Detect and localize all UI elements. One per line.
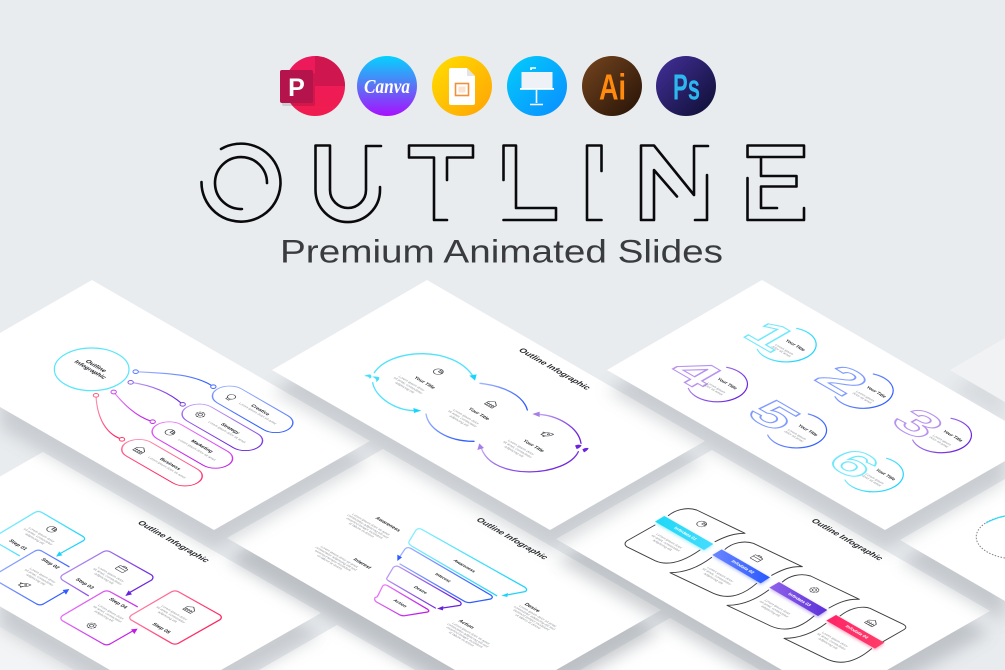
wave unit 2: sit amet, consectetur	[701, 567, 733, 586]
panel: dotted circle slide at right edge	[900, 479, 1005, 601]
cycle stage 3: adipiscing elit	[503, 445, 525, 458]
side label: desire: consectetur adipiscing elit sed	[512, 605, 556, 631]
panel: wavy infodata slide	[556, 450, 990, 670]
icon: Canva	[357, 56, 417, 116]
wave unit 4: Infodata 04	[844, 625, 870, 640]
pill: marketing	[145, 418, 240, 472]
wave unit 1: Lorem ipsum dolor	[655, 533, 684, 550]
icon: Keynote	[507, 56, 567, 116]
cycle stage 2: Your Title	[466, 407, 491, 421]
step 05: Lorem ipsum dolor	[160, 605, 189, 621]
pill: strategy	[175, 400, 270, 455]
wave unit 1: sit amet, consectetur	[650, 534, 682, 553]
step 04	[61, 591, 138, 645]
cycle stage 1: Your Title	[412, 376, 437, 390]
wave unit 3: Infodata 03	[787, 592, 813, 607]
side label: awareness: Awareness	[373, 516, 402, 533]
icon: PowerPoint: P	[288, 74, 305, 102]
step 02: adipiscing elit	[25, 573, 46, 586]
wave unit 3: Lorem ipsum dolor	[763, 599, 792, 616]
step 04: adipiscing elit	[93, 610, 115, 622]
cycle stage 2: sit amet, consectetur	[447, 410, 479, 428]
icon: Illustrator: Ai	[599, 66, 626, 108]
connector: strategy	[128, 380, 185, 406]
step 01: Lorem ipsum dolor	[27, 527, 56, 543]
wave unit 1: Infodata 01	[673, 526, 699, 541]
side label: interest: Lorem ipsum dolor sit amet	[319, 545, 359, 568]
number 5: Lorem ipsum	[786, 428, 807, 441]
pill: strategy: Lorem ipsum dolor sit amet	[207, 421, 247, 444]
number 5: dolor sit amet	[783, 430, 805, 443]
subtitle: Premium Animated Slides	[280, 234, 723, 270]
funnel level: desire: Desire	[413, 585, 429, 595]
wave unit 1	[625, 509, 745, 563]
side label: interest: ut labore et dolore	[316, 554, 344, 570]
number 4: 4	[657, 351, 735, 396]
step 04: sit amet, consectetur	[92, 605, 124, 624]
panel: bottom row slide centre	[259, 625, 415, 670]
funnel level: awareness: Awareness	[452, 559, 477, 573]
funnel level: desire	[387, 566, 461, 610]
step 02: sit amet, consectetur	[23, 568, 55, 587]
funnel level: action: Action	[392, 599, 409, 608]
title: OUTLINE drawn in outline strokes	[201, 144, 804, 222]
step 01	[0, 511, 85, 557]
number 1: dolor sit amet	[770, 345, 792, 358]
icon: PowerPoint	[280, 56, 345, 116]
pill: business: Business	[158, 457, 182, 471]
side label: interest: Interest	[351, 558, 373, 570]
cycle stage 3: sit amet, consectetur	[502, 440, 534, 459]
connector: creative	[133, 370, 216, 388]
number 6: 6	[815, 441, 892, 486]
number 3: dolor sit amet	[928, 436, 950, 448]
cycle stage 3: Your Title	[521, 439, 546, 453]
icon: Illustrator	[582, 56, 642, 116]
cycle stage 3	[477, 412, 589, 472]
number 3: Lorem ipsum	[931, 434, 952, 446]
side label: action: consectetur adipiscing elit sed	[446, 623, 490, 648]
slide title: Outline Infographic	[474, 516, 552, 561]
side label: action: eiusmod tempor incididunt	[445, 626, 484, 648]
number 4: dolor sit amet	[702, 383, 724, 396]
cycle stage 2	[426, 383, 527, 441]
pill: marketing: Lorem ipsum dolor sit amet	[177, 438, 217, 461]
wave unit 2: Infodata 02	[730, 560, 756, 575]
cycle stage 1: adipiscing elit	[394, 381, 415, 394]
icon: Google Slides	[432, 56, 492, 116]
pill: business: Lorem ipsum dolor sit amet	[147, 456, 187, 479]
panel: cycle slide	[272, 280, 705, 530]
wave unit 4: sit amet, consectetur	[816, 632, 848, 651]
side label: action	[439, 619, 493, 652]
step 03: Step 03	[73, 578, 95, 590]
slide title: Outline Infographic	[809, 517, 887, 562]
main circle: Infographic	[72, 360, 108, 381]
wave unit 3: adipiscing elit	[760, 605, 781, 617]
number 6: Your Title	[874, 468, 897, 481]
funnel level: awareness	[409, 529, 527, 597]
pill: creative: Creative	[249, 404, 271, 417]
panel: bottom row slide left	[0, 627, 74, 670]
side label: action: ut labore et dolore	[447, 631, 475, 647]
step 04: Lorem ipsum dolor	[97, 604, 126, 621]
side label: interest: consectetur adipiscing elit sed	[314, 546, 358, 571]
side label: desire: Desire	[522, 602, 541, 613]
wave unit 4	[784, 607, 906, 662]
pill: creative	[205, 382, 300, 437]
funnel level: action	[375, 585, 429, 616]
number 4: Lorem ipsum	[706, 382, 727, 394]
number 6: Lorem ipsum	[864, 473, 885, 485]
number 5	[735, 393, 827, 448]
icon: Canva: Canva	[364, 76, 410, 98]
step 05: sit amet, consectetur	[155, 606, 187, 624]
step 01: sit amet, consectetur	[22, 528, 54, 546]
number 6: dolor sit amet	[861, 474, 882, 487]
icon: Photoshop	[656, 56, 716, 116]
side label: interest: eiusmod tempor incididunt	[313, 549, 352, 572]
number 2: dolor sit amet	[851, 392, 873, 404]
step 05: adipiscing elit	[156, 611, 178, 623]
wave unit 4: adipiscing elit	[817, 637, 839, 650]
step 03	[61, 551, 153, 596]
side label: desire: Lorem ipsum dolor sit amet	[518, 605, 557, 628]
side label: desire	[506, 602, 559, 634]
number 1: Lorem ipsum	[774, 343, 795, 356]
wave unit 2: adipiscing elit	[702, 572, 724, 585]
side label: awareness: Lorem ipsum dolor sit amet	[351, 513, 391, 536]
step 02: Step 02	[39, 558, 61, 570]
panel: pills slide	[0, 280, 370, 530]
side label: awareness	[339, 512, 402, 543]
slide title: Outline Infographic	[135, 519, 213, 564]
cycle stage 1	[364, 354, 477, 413]
step 01: adipiscing elit	[24, 533, 45, 545]
connector: marketing	[111, 390, 155, 423]
number 2: Lorem ipsum	[855, 390, 876, 402]
number 4: Your Title	[716, 377, 739, 390]
wave unit 2: Lorem ipsum dolor	[706, 566, 735, 583]
panel: far right faded slide	[950, 338, 1005, 402]
icon row	[280, 56, 716, 116]
number 3: 3	[879, 401, 957, 446]
slide collage	[0, 280, 1005, 670]
pill: strategy: Strategy	[219, 422, 241, 435]
number 2: Your Title	[865, 385, 888, 399]
wave unit 2	[670, 542, 802, 596]
number 1: 1	[731, 314, 809, 359]
side label: action: Action	[456, 619, 475, 630]
number 1: Your Title	[784, 339, 807, 352]
side label: awareness: consectetur adipiscing elit sed	[346, 514, 390, 539]
step 01: Step 01	[7, 539, 28, 551]
step 03: Lorem ipsum dolor	[97, 566, 126, 583]
step 05	[130, 591, 221, 644]
wave unit 3	[727, 575, 859, 629]
side label: interest	[308, 544, 373, 575]
step 02: Lorem ipsum dolor	[28, 567, 57, 584]
funnel level: interest: Interest	[434, 572, 453, 583]
side label: desire: ut labore et dolore	[514, 614, 542, 630]
cycle stage 1: sit amet, consectetur	[392, 376, 424, 395]
step 02	[0, 550, 69, 605]
step 03: adipiscing elit	[93, 572, 115, 585]
cycle stage 1: Lorem ipsum dolor	[397, 375, 426, 392]
side label: awareness: eiusmod tempor incididunt	[345, 517, 384, 539]
side label: action: Lorem ipsum dolor sit amet	[451, 622, 491, 645]
wave unit 3: sit amet, consectetur	[758, 600, 790, 619]
main circle	[54, 348, 129, 391]
step 05: Step 05	[150, 622, 172, 635]
side label: awareness: ut labore et dolore	[347, 522, 375, 538]
slide title: Outline Infographic	[516, 346, 594, 391]
wave unit 4: Lorem ipsum dolor	[821, 631, 850, 648]
number 3: Your Title	[942, 429, 965, 443]
cycle stage 2: adipiscing elit	[448, 415, 470, 427]
icon: Photoshop: Ps	[673, 66, 700, 108]
step 04: Step 04	[107, 597, 128, 610]
number 5: Your Title	[797, 424, 820, 437]
funnel level: interest	[397, 548, 492, 603]
number 2: 2	[803, 358, 881, 403]
pill: business	[115, 435, 209, 490]
panel: steps slide	[0, 452, 321, 670]
panel: funnel slide	[227, 449, 661, 670]
panel: numbers slide	[607, 280, 1005, 530]
pill: marketing: Marketing	[189, 439, 214, 454]
side label: desire: eiusmod tempor incididunt	[512, 609, 551, 631]
wave unit 1: adipiscing elit	[651, 539, 673, 551]
connector: business	[93, 393, 125, 441]
panel: bottom row slide right	[580, 618, 760, 670]
pill: creative: Lorem ipsum dolor sit amet	[238, 402, 277, 425]
cycle stage 2: Lorem ipsum dolor	[452, 409, 481, 425]
cycle stage 3: Lorem ipsum dolor	[507, 439, 536, 456]
step 03: sit amet, consectetur	[92, 567, 124, 586]
number 5: 5	[735, 393, 812, 438]
main circle: Outline	[83, 359, 109, 374]
